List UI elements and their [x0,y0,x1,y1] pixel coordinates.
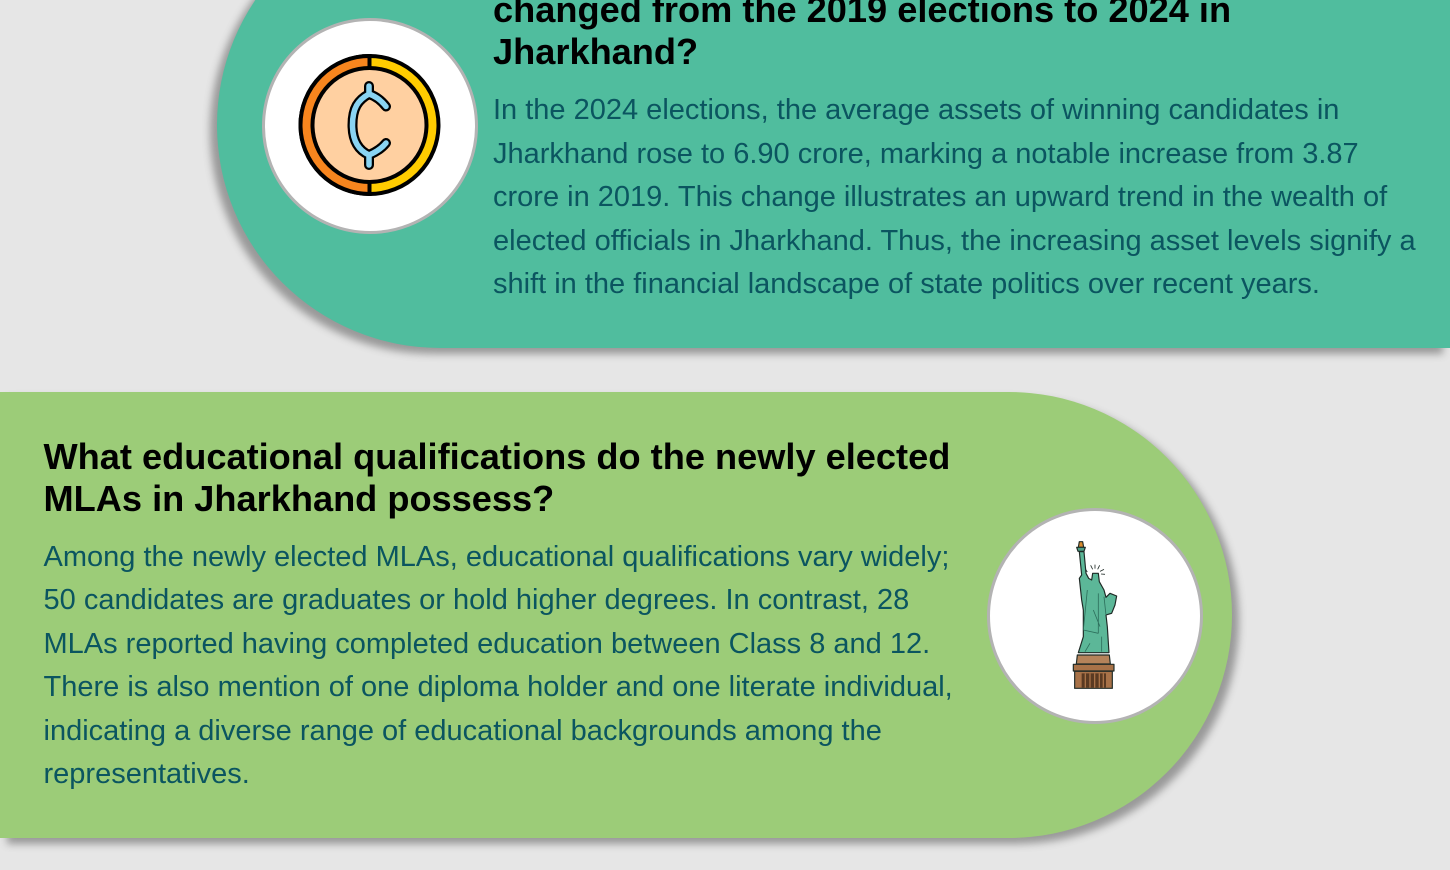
text: education answer: Among the newly elected MLAs, educational qualifications vary widely; [44,541,949,573]
text: education answer: MLAs reported having completed education between Class 8 and 12. [44,628,930,660]
icon: statue circle [987,508,1203,724]
text: education answer: indicating a diverse range of educational backgrounds among the [44,715,882,747]
text: education question heading [44,436,950,519]
text: assets question heading: Jharkhand? [493,31,698,72]
text: education answer: 50 candidates are graduates or hold higher degrees. In contrast, 28 [44,584,909,616]
text: assets answer: shift in the financial landscape of state politics over recent years. [493,268,1320,300]
text: assets question heading [493,0,1231,72]
icon: coin circle [262,18,478,234]
text: education question heading: What educational qualifications do the newly elected [44,436,950,477]
text: education question heading: MLAs in Jharkhand possess? [44,478,554,519]
text: education answer: representatives. [44,758,250,790]
text: assets answer: In the 2024 elections, the average assets of winning candidates in [493,94,1339,126]
text: assets answer: Jharkhand rose to 6.90 crore, marking a notable increase from 3.87 [493,138,1359,170]
panel: education question [0,392,1232,838]
text: education answer: There is also mention of one diploma holder and one literate individual, [44,671,953,703]
text: education answer [44,541,953,790]
text: assets answer: crore in 2019. This change illustrates an upward trend in the wealth of [493,181,1387,213]
text: assets answer [493,94,1416,300]
panel: assets question [217,0,1450,348]
text: assets answer: elected officials in Jharkhand. Thus, the increasing asset levels signify a [493,225,1416,257]
